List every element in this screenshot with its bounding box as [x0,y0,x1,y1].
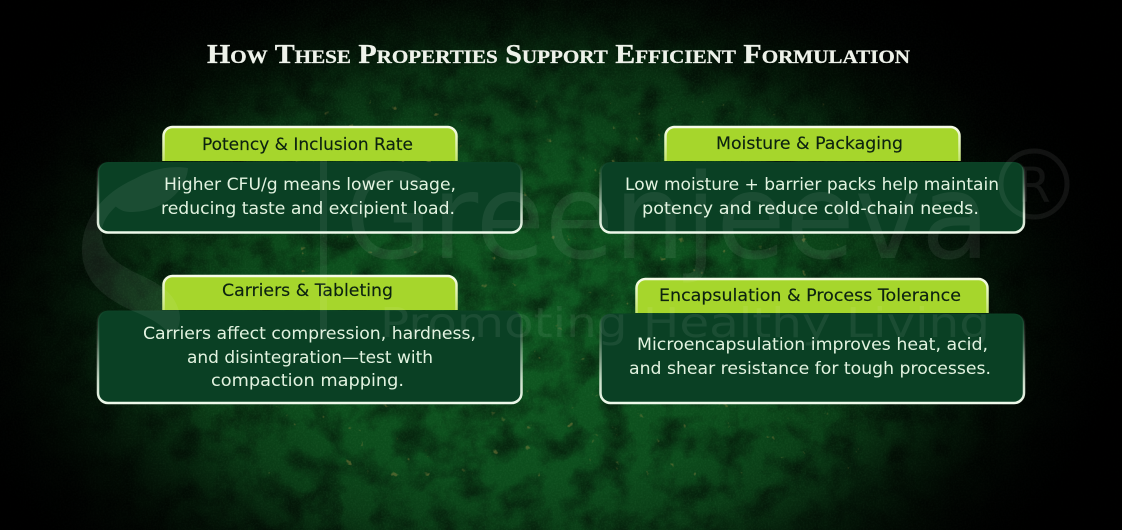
card: moisture text [600,162,1024,232]
tab: carriers heading: Carriers & Tableting [222,281,393,301]
panel: carriers and tableting [98,276,522,403]
card: carriers text: Carriers affect compression, hardness, [143,324,476,344]
tab: encapsulation heading [636,279,988,313]
watermark: brand logo and name overlaying panels: R [1017,158,1051,214]
card: potency text: reducing taste and excipient load. [161,199,455,219]
tab: potency heading: Potency & Inclusion Rate [202,135,413,155]
card: moisture text: Low moisture + barrier packs help maintain [625,175,999,195]
watermark: brand logo and name overlaying panels: Greenjeeva [345,148,990,286]
panel: potency and inclusion rate [98,127,522,232]
title: How These Properties Support Efficient Formulation [207,39,910,69]
tab: potency heading [164,127,457,161]
card: encapsulation text: Microencapsulation improves heat, acid, [637,335,988,355]
watermark: brand logo and name overlaying panels: Promoting Healthy Living [380,299,990,347]
card: carriers text: compaction mapping. [211,371,404,391]
card: potency text [98,162,522,232]
watermark: brand logo and name overlaying panels [82,148,1067,347]
card: encapsulation text: and shear resistance for tough processes. [629,359,991,379]
card: encapsulation text [600,314,1024,403]
card: carriers text: and disintegration—test with [187,348,433,368]
tab: carriers heading [164,276,457,310]
tab: moisture heading [666,127,960,161]
panel: moisture and packaging [600,127,1024,232]
tab: moisture heading: Moisture & Packaging [716,134,903,154]
panel: encapsulation and process tolerance [600,279,1024,403]
card: moisture text: potency and reduce cold-chain needs. [642,199,979,219]
card: carriers text [98,310,522,403]
card: potency text: Higher CFU/g means lower usage, [164,175,456,195]
tab: encapsulation heading: Encapsulation & Process Tolerance [659,286,961,306]
